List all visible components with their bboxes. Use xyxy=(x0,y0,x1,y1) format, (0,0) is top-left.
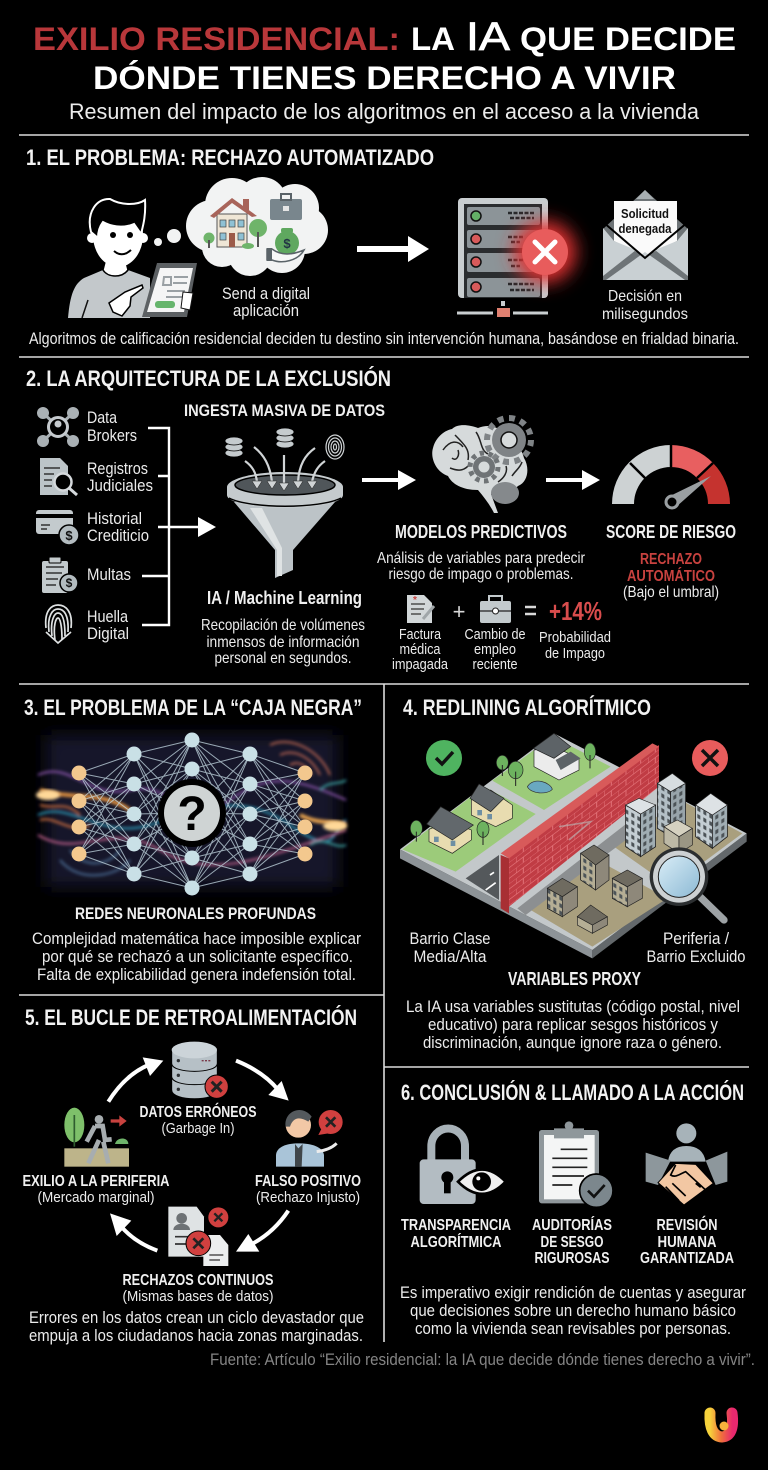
icon: registros judiciales xyxy=(40,458,77,495)
text: rechazo automatico xyxy=(623,551,719,601)
label: exilio a la periferia: (Mercado marginal) xyxy=(38,1190,154,1206)
subheading: ingesta masiva: INGESTA MASIVA DE DATOS xyxy=(184,401,385,420)
text: rechazo automatico: (Bajo el umbral) xyxy=(623,584,719,601)
text: complejidad: por qué se rechazó a un solicitante específico. xyxy=(42,948,353,966)
label: registros judiciales: Judiciales xyxy=(87,477,153,495)
icon: envelope with denied letter: Solicitud xyxy=(621,206,669,221)
ruined buildings xyxy=(547,845,642,933)
label: transparencia algoritmica: ALGORÍTMICA xyxy=(410,1232,502,1251)
house 1 xyxy=(427,807,473,853)
label: rechazos continuos: RECHAZOS CONTINUOS xyxy=(122,1272,274,1289)
panel: 2 arquitectura de la exclusion xyxy=(26,366,736,673)
label: probabilidad de impago: Probabilidad xyxy=(539,630,611,646)
label: falso positivo: FALSO POSITIVO xyxy=(255,1173,361,1190)
label: transparencia algoritmica xyxy=(401,1217,511,1251)
text: variables sustitutas: La IA usa variables sustitutas (código postal, nivel xyxy=(406,998,740,1016)
house 3 xyxy=(533,733,581,780)
stat: +14%: +14% xyxy=(549,596,602,626)
label: transparencia algoritmica: TRANSPARENCIA xyxy=(401,1217,511,1234)
text: es imperativo xyxy=(400,1284,746,1338)
label: barrio clase media/alta: Barrio Clase xyxy=(410,930,490,948)
heading 3: 3. EL PROBLEMA DE LA “CAJA NEGRA” xyxy=(24,695,362,720)
icon: rejected applicant xyxy=(276,1110,343,1167)
label: barrio clase media/alta xyxy=(410,930,490,966)
title: DÓNDE TIENES DERECHO A VIVIR xyxy=(93,60,676,96)
label: rechazos continuos xyxy=(122,1272,274,1305)
label: data brokers: Data xyxy=(87,409,118,427)
chart: risk gauge xyxy=(612,445,730,508)
label: data brokers xyxy=(87,409,137,445)
text: errores en los datos xyxy=(29,1309,364,1345)
label: cambio de empleo reciente: reciente xyxy=(472,657,518,673)
label: historial crediticio: Historial xyxy=(87,510,142,528)
illustration: neural network: ? xyxy=(177,788,207,841)
arrow xyxy=(357,236,429,262)
label: cambio de empleo reciente: Cambio de xyxy=(464,627,526,643)
bracket and arrow to funnel xyxy=(142,428,216,625)
text: variables sustitutas: discriminación, aunque ignore raza o género. xyxy=(423,1034,722,1052)
icon: person with tablet xyxy=(68,199,197,318)
icon: approved check xyxy=(426,740,462,776)
text: analisis de variables xyxy=(377,550,586,583)
label: registros judiciales: Registros xyxy=(87,460,148,478)
text: es imperativo: como la vivienda sean revisables por personas. xyxy=(415,1320,731,1338)
label: historial crediticio xyxy=(87,510,149,545)
label: send a digital aplicacion: aplicación xyxy=(233,301,299,320)
label: factura medica impagada: impagada xyxy=(392,657,449,673)
label: falso positivo: (Rechazo Injusto) xyxy=(256,1190,360,1206)
label: factura medica impagada xyxy=(392,627,449,673)
heading 1: 1. EL PROBLEMA: RECHAZO AUTOMATIZADO xyxy=(26,145,434,170)
label: decision en milisegundos: milisegundos xyxy=(602,306,688,323)
text: complejidad xyxy=(32,930,361,984)
plus sign: + xyxy=(453,599,465,624)
label: falso positivo xyxy=(255,1173,361,1206)
icon: person exiled to periphery xyxy=(64,1108,129,1167)
label: revision humana: REVISIÓN xyxy=(656,1215,718,1234)
icon: lock with eye xyxy=(420,1128,506,1204)
text: recopilacion: inmensos de información xyxy=(206,634,360,651)
text: errores en los datos: Errores en los datos crean un ciclo devastador que xyxy=(29,1309,364,1327)
icon: brain with gears xyxy=(432,418,531,513)
label: barrio clase media/alta: Media/Alta xyxy=(414,948,487,966)
house 2 xyxy=(470,784,512,827)
label: revision humana: GARANTIZADA xyxy=(640,1250,734,1267)
text: complejidad: Falta de explicabilidad genera indefensión total. xyxy=(37,966,356,984)
icon: rejected documents xyxy=(168,1207,228,1266)
label: exilio a la periferia: EXILIO A LA PERIFERIA xyxy=(22,1173,170,1190)
text: variables sustitutas: educativo) para replicar sesgos históricos y xyxy=(428,1016,719,1034)
panel: 4 redlining xyxy=(400,695,747,1052)
magnifying glass xyxy=(650,847,724,920)
label: send a digital aplicacion: Send a digital xyxy=(222,284,310,303)
label: datos erroneos xyxy=(140,1102,257,1137)
icon: envelope with denied letter xyxy=(603,190,688,280)
label: ia / machine learning: IA / Machine Learning xyxy=(207,588,362,608)
label: revision humana: HUMANA xyxy=(658,1234,717,1251)
label: auditorias de sesgo: DE SESGO xyxy=(540,1234,604,1251)
label: factura medica impagada: médica xyxy=(400,642,441,658)
text: errores en los datos: empuja a los ciudadanos hacia zonas marginadas. xyxy=(29,1327,363,1345)
icon: thought cloud xyxy=(186,177,328,276)
title: IA xyxy=(466,15,510,59)
icon: envelope with denied letter: denegada xyxy=(618,221,672,236)
label: huella digital: Huella xyxy=(87,608,129,626)
label: auditorias de sesgo xyxy=(532,1215,612,1267)
icons: conclusion actions xyxy=(420,1121,727,1207)
arrow xyxy=(546,470,600,490)
label: datos erroneos: (Garbage In) xyxy=(162,1121,234,1137)
label: historial crediticio: Crediticio xyxy=(87,527,149,545)
logo xyxy=(710,1413,733,1437)
label: decision en milisegundos xyxy=(602,288,688,323)
label: decision en milisegundos: Decisión en xyxy=(608,288,682,305)
text: recopilacion: Recopilación de volúmenes xyxy=(201,617,365,634)
icon: server with rejection xyxy=(457,198,576,317)
panel: 6 conclusion xyxy=(400,1080,746,1338)
illustration: neural network xyxy=(36,732,347,896)
label: periferia / barrio excluido: Barrio Excluido xyxy=(646,948,746,966)
text: complejidad: Complejidad matemática hace imposible explicar xyxy=(32,930,361,948)
illustration: isometric redlining map xyxy=(400,733,747,958)
title: EXILIO RESIDENCIAL: xyxy=(33,21,400,57)
label: datos erroneos: DATOS ERRÓNEOS xyxy=(140,1102,257,1121)
icon: multas: $ xyxy=(66,576,73,590)
heading 2: 2. LA ARQUITECTURA DE LA EXCLUSIÓN xyxy=(26,366,391,391)
icon: database error xyxy=(172,1042,228,1099)
label: registros judiciales xyxy=(87,460,153,495)
text: rechazo automatico: RECHAZO xyxy=(640,551,702,568)
label: send a digital aplicacion xyxy=(222,284,310,320)
label: cambio de empleo reciente xyxy=(464,627,526,673)
title xyxy=(33,15,736,96)
icon: funnel xyxy=(225,428,344,578)
text: variables sustitutas xyxy=(406,998,740,1052)
label: huella digital xyxy=(87,608,129,643)
text: analisis de variables: riesgo de impago o problemas. xyxy=(388,566,574,583)
wall xyxy=(501,743,659,913)
text: recopilacion: personal en segundos. xyxy=(214,650,352,667)
icon: historial crediticio: $ xyxy=(65,528,73,543)
icon: thought bubbles xyxy=(154,229,181,246)
heading 5: 5. EL BUCLE DE RETROALIMENTACIÓN xyxy=(25,1005,357,1030)
subtitle: Resumen del impacto de los algoritmos en el acceso a la vivienda xyxy=(69,99,700,124)
icon: data brokers xyxy=(37,407,79,447)
city towers xyxy=(626,773,727,857)
icon: medical invoice xyxy=(407,595,434,623)
equals sign xyxy=(525,607,536,614)
label: huella digital: Digital xyxy=(87,625,129,643)
icon: rejected x xyxy=(692,740,728,776)
icon: briefcase xyxy=(480,596,511,623)
label: rechazos continuos: (Mismas bases de datos) xyxy=(122,1289,274,1305)
label: probabilidad de impago xyxy=(539,630,611,662)
text: rechazo automatico: AUTOMÁTICO xyxy=(627,566,715,585)
title: QUE DECIDE xyxy=(520,21,736,57)
panel: 3 caja negra xyxy=(24,695,362,984)
icon: human review handshake xyxy=(646,1123,727,1205)
icon: medical invoice: * xyxy=(413,595,417,606)
label: auditorias de sesgo: AUDITORÍAS xyxy=(532,1215,612,1234)
label: revision humana xyxy=(640,1215,734,1267)
icon: multas xyxy=(42,557,78,593)
icon: historial crediticio xyxy=(36,510,79,545)
label: modelos predictivos: MODELOS PREDICTIVOS xyxy=(395,522,567,542)
label: cambio de empleo reciente: empleo xyxy=(474,642,516,658)
panel: 5 bucle de retroalimentacion xyxy=(22,1005,364,1345)
icon: huella digital xyxy=(46,605,71,643)
label: factura medica impagada: Factura xyxy=(399,627,442,643)
label: periferia / barrio excluido xyxy=(646,930,746,966)
icon: audit clipboard xyxy=(539,1121,613,1207)
label: probabilidad de impago: de Impago xyxy=(545,646,605,662)
icon: thought cloud: $ xyxy=(283,236,291,251)
heading 4: 4. REDLINING ALGORÍTMICO xyxy=(403,695,651,720)
label: auditorias de sesgo: RIGUROSAS xyxy=(534,1250,610,1267)
text: analisis de variables: Análisis de variables para predecir xyxy=(377,550,586,567)
label: exilio a la periferia xyxy=(22,1173,170,1206)
diagram: feedback loop xyxy=(64,1042,343,1266)
loop arrows xyxy=(108,1057,289,1252)
label: multas: Multas xyxy=(87,566,131,584)
title: LA xyxy=(411,21,455,57)
label: periferia / barrio excluido: Periferia / xyxy=(663,930,729,948)
subheading: redes neuronales: REDES NEURONALES PROFUNDAS xyxy=(75,904,316,923)
text: es imperativo: que decisiones sobre un derecho humano básico xyxy=(410,1302,736,1320)
panel: 1 el problema xyxy=(26,145,739,348)
label: data brokers: Brokers xyxy=(87,427,137,445)
text: recopilacion xyxy=(201,617,365,667)
subheading: variables proxy: VARIABLES PROXY xyxy=(508,969,641,989)
arrow xyxy=(362,470,416,490)
